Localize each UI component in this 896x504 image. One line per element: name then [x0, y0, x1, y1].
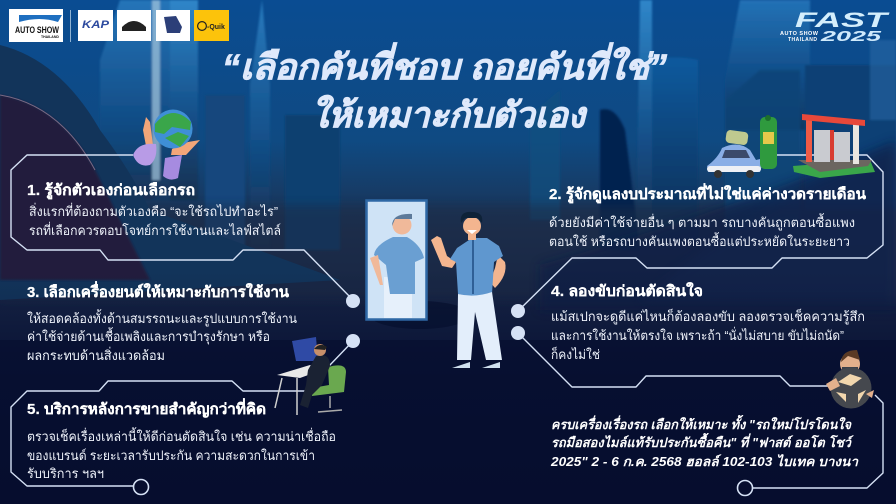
title: [222, 42, 668, 135]
logo: e-Quik: [194, 10, 229, 41]
body 5: ของแบรนด์ ระยะเวลารับประกัน ความสะดวกในการเข้า: [27, 448, 315, 463]
logo: FAST Auto Show 2025: AUTO SHOW: [780, 31, 819, 37]
logo: FAST Auto Show 2025: [780, 9, 891, 45]
icon: petrol station: [793, 114, 875, 178]
logo: FAST Auto Show 2025: 2025: [819, 28, 882, 45]
connector frames: [11, 155, 883, 488]
heading 3: 3. เลือกเครื่องยนต์ให้เหมาะกับการใช้งาน: [27, 281, 290, 301]
heading 5: 5. บริการหลังการขายสำคัญกว่าที่คิด: [27, 398, 266, 418]
panel 1: know yourself: [27, 182, 281, 238]
icon: hands holding globe: [133, 110, 200, 180]
icon: blue car: [707, 144, 764, 178]
title: ให้เหมาะกับตัวเอง: [311, 95, 588, 135]
man: [431, 212, 506, 368]
body 2: ตอนใช้ หรือรถบางคันแพงตอนซื้อแต่ประหยัดในระยะยาว: [549, 232, 850, 249]
body 1: รถที่เลือกควรตอบโจทย์การใช้งานและไลฟ์สไตล์: [29, 222, 281, 238]
icon: man and mirror: [366, 200, 506, 368]
body 3: ผลกระทบด้านสิ่งแวดล้อม: [27, 347, 165, 363]
icon: battery: [725, 130, 749, 145]
body 4: และการใช้งานให้ตรงใจ เพราะถ้า “นั่งไม่สบาย ขับไม่ถนัด”: [551, 327, 844, 343]
icon: car, EV charger and petrol station: [707, 114, 875, 178]
icon: green EV charger: [760, 115, 777, 169]
panel 2: budget: [549, 183, 867, 249]
body 4: แม้สเปกจะดูดีแค่ไหนก็ต้องลองขับ ลองตรวจเช็คความรู้สึก: [551, 307, 865, 325]
logo: KAP: [78, 10, 113, 41]
heading 2: 2. รู้จักดูแลงบประมาณที่ไม่ใช่แค่ค่างวดรายเดือน: [549, 183, 867, 204]
body 2: ด้วยยังมีค่าใช้จ่ายอื่น ๆ ตามมา รถบางคันถูกตอนซื้อแพง: [549, 213, 855, 231]
heading 4: 4. ลองขับก่อนตัดสินใจ: [551, 282, 703, 300]
panel 4: test drive: [551, 282, 865, 362]
callout: event details: ครบเครื่องเรื่องรถ เลือกให้เหมาะ ทั้ง "รถใหม่โปรโดนใจ: [551, 414, 852, 432]
body 4: ก็คงไม่ใช่: [551, 345, 600, 362]
panel 5: after-sales: [27, 398, 336, 481]
logo: KAP: KAP: [82, 19, 110, 31]
icon: person at computer desk: [275, 337, 346, 415]
body 5: รับบริการ ฯลฯ: [27, 466, 104, 481]
body 3: ค่าใช้จ่ายด้านเชื้อเพลิงและการบำรุงรักษา หรือ: [27, 327, 270, 345]
title: “เลือกคันที่ชอบ ถอยคันที่ใช่”: [222, 42, 668, 87]
panel 3: engine: [27, 281, 297, 363]
logo: Fast Auto Show Thailand: THAILAND: [41, 35, 59, 39]
logo bar: sponsors: [9, 9, 229, 42]
callout: event details: รถมือสองไมล์แท้รับประกันซื้อคืน" ที่ "ฟาสต์ ออโต โชว์: [551, 432, 854, 450]
callout: event details: 2025" 2 - 6 ก.ค. 2568 ฮอลล์ 102-103 ไบเทค บางนา: [550, 454, 859, 469]
icon: driver with steering wheel: [826, 350, 874, 408]
heading 1: 1. รู้จักตัวเองก่อนเลือกรถ: [27, 182, 195, 200]
connector nodes: [134, 294, 752, 496]
body 3: ให้สอดคล้องทั้งด้านสมรรถนะและรูปแบบการใช้งาน: [27, 309, 297, 327]
logo: Fast Auto Show Thailand: AUTO SHOW: [15, 25, 59, 36]
body 1: สิ่งแรกที่ต้องถามตัวเองคือ “จะใช้รถไปทำอะไร”: [29, 203, 278, 219]
logo: Fast Auto Show Thailand: [9, 9, 63, 42]
logo: dark emblem: [117, 10, 151, 41]
logo: blue lion: [156, 10, 190, 41]
callout: event details: [550, 414, 859, 469]
logo: FAST Auto Show 2025: THAILAND: [788, 37, 817, 43]
mirror: [366, 200, 426, 320]
logo: FAST Auto Show 2025: FAST: [795, 9, 891, 32]
body 5: ตรวจเช็คเรื่องเหล่านี้ให้ดีก่อนตัดสินใจ เช่น ความน่าเชื่อถือ: [27, 427, 336, 444]
logo: e-Quik: -Quik: [207, 24, 225, 31]
